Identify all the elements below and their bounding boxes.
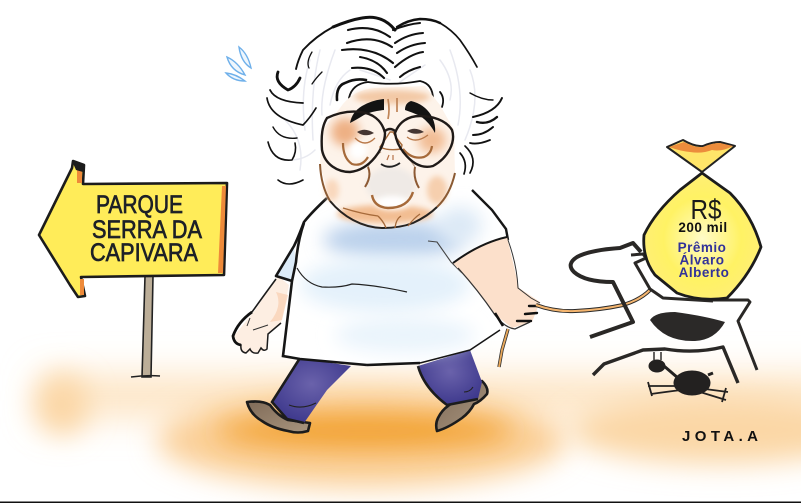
- right arm and hand: [453, 237, 541, 329]
- hanging rope end: [499, 329, 508, 367]
- sign text: CAPIVARA: [90, 239, 198, 267]
- right trouser leg: [418, 350, 482, 405]
- dog head and neck: [571, 243, 641, 337]
- chin and cheek lines: [372, 192, 413, 208]
- figure: walking caricature: [233, 16, 541, 432]
- bag text: Álvaro: [679, 252, 725, 268]
- shirt: [276, 190, 508, 365]
- money bag: [644, 140, 761, 299]
- eyes: [357, 129, 424, 135]
- left shoe: [247, 401, 310, 432]
- sign text: [90, 191, 202, 267]
- leash rope: [536, 290, 650, 311]
- left trouser leg: [272, 358, 351, 423]
- sign text: SERRA DA: [92, 216, 202, 244]
- right shoe: [436, 381, 487, 431]
- figure: small animal under dog: [648, 352, 728, 402]
- icon: sweat drops: [226, 47, 251, 81]
- left arm and hand: [233, 276, 289, 353]
- face outline: [330, 201, 437, 228]
- sign text: PARQUE: [96, 191, 183, 219]
- eyebrows: [350, 99, 435, 133]
- bag text: Prêmio: [678, 240, 726, 255]
- bag tie top: [667, 140, 735, 172]
- dog back and legs: [700, 300, 757, 370]
- nose: [380, 132, 402, 150]
- bag text: Alberto: [679, 265, 729, 280]
- bottom border line: [0, 502, 801, 503]
- bag body: [644, 173, 761, 299]
- bag text: R$: [690, 194, 722, 225]
- mouth: [381, 163, 400, 167]
- hair ink strokes: [267, 17, 502, 184]
- bag text: 200 mil: [678, 220, 728, 235]
- dog body spot: [650, 312, 725, 341]
- sign post: [131, 276, 160, 377]
- panel: direction sign: [39, 161, 227, 377]
- figure: dog: [571, 243, 757, 383]
- face: [320, 86, 455, 228]
- hair: [267, 16, 502, 185]
- signature: JOTA.A: [682, 428, 758, 445]
- glasses: [322, 112, 453, 172]
- bag text: [678, 194, 729, 280]
- sign arrow board: [39, 161, 227, 297]
- background: orange ground wash: [36, 375, 801, 488]
